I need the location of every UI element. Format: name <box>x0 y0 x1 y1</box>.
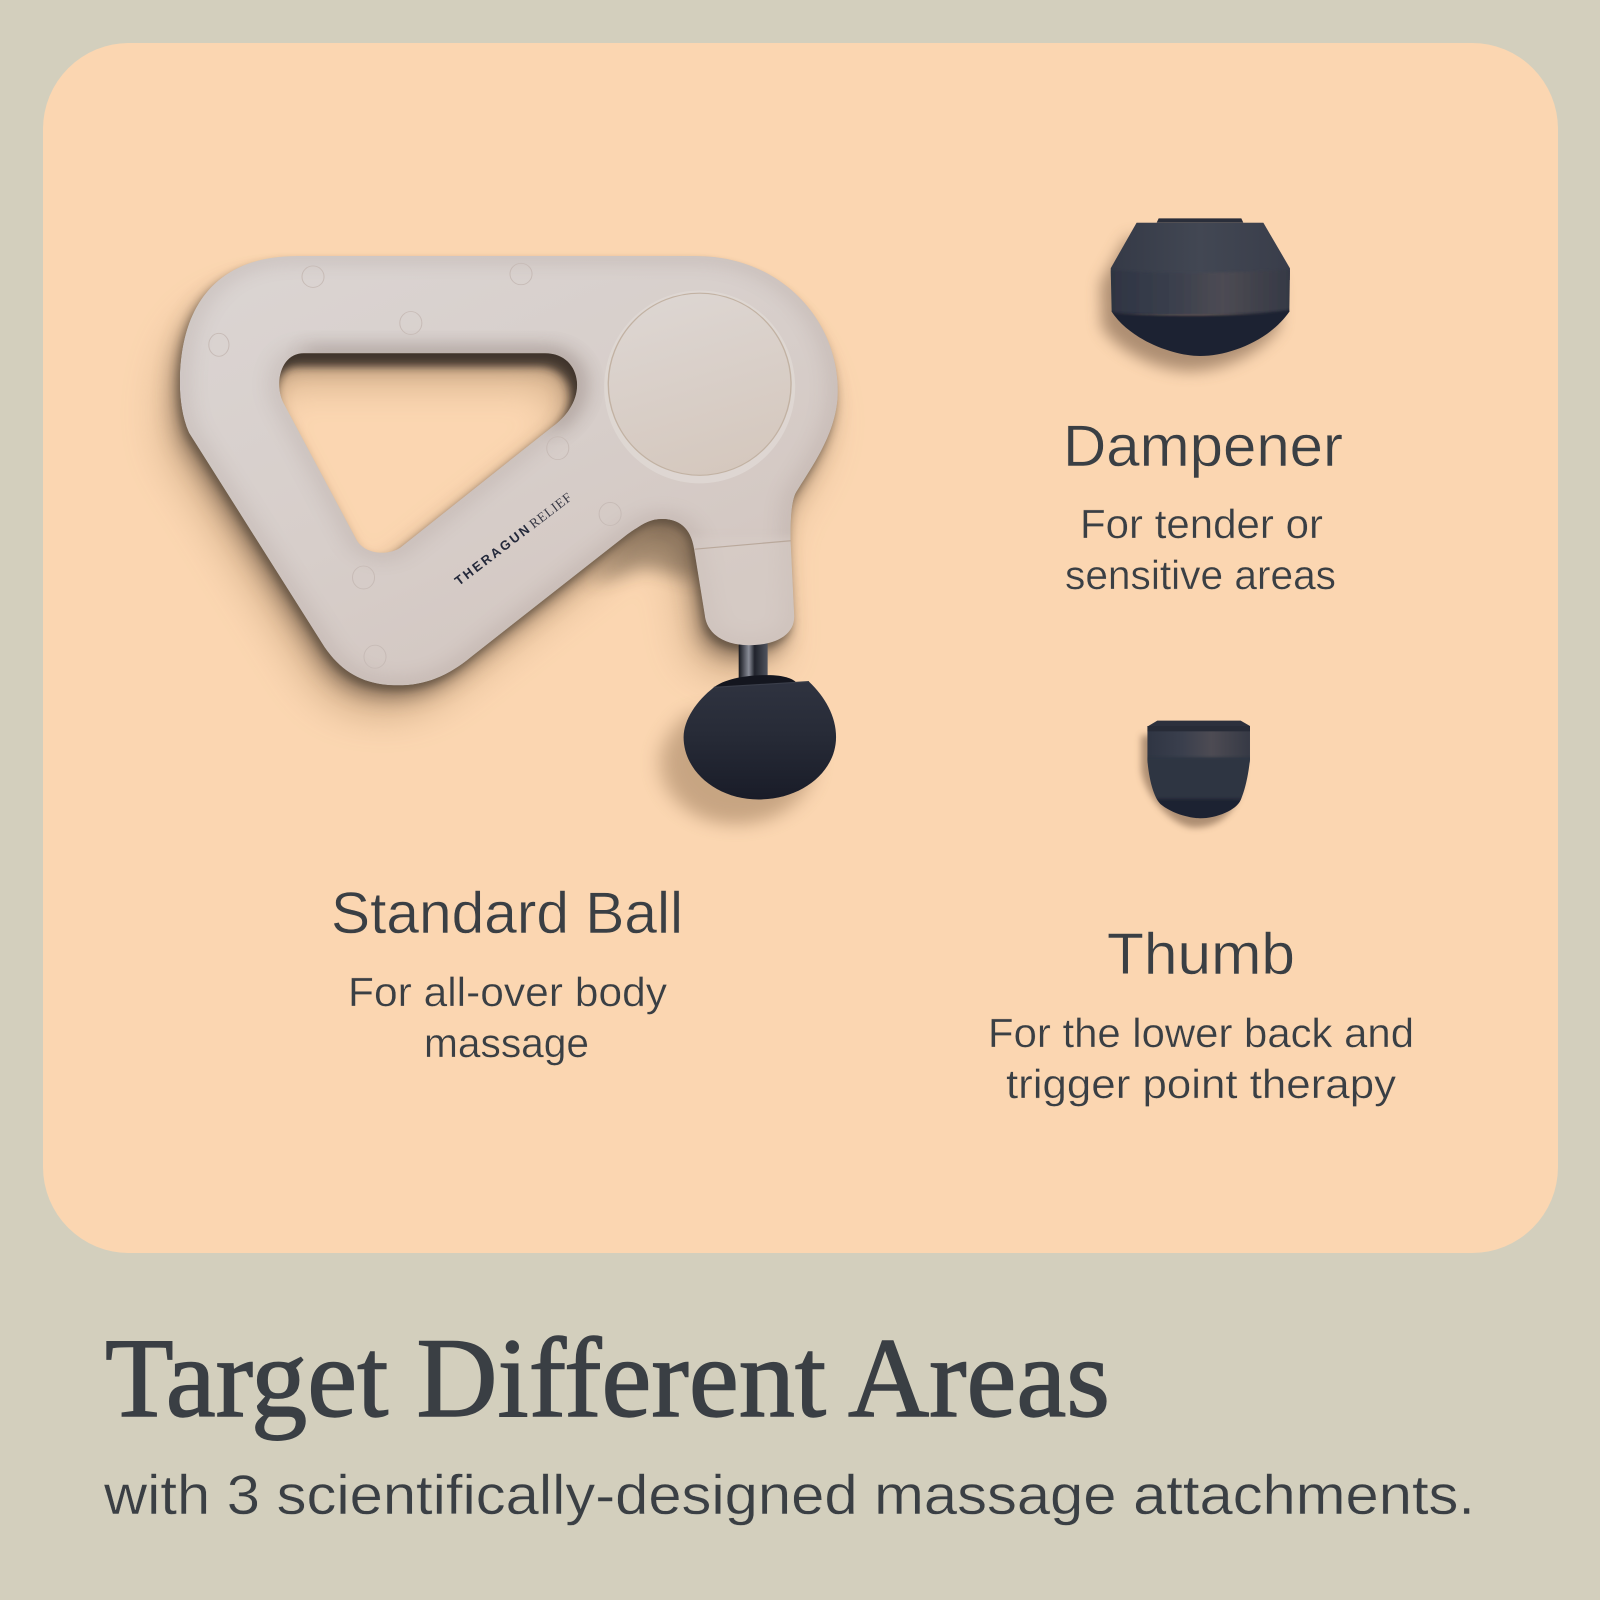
label: dampener: For tender or <box>1080 501 1323 547</box>
label: standard ball: For all-over body <box>348 969 668 1015</box>
embossed dots <box>209 263 621 668</box>
panel: attachments <box>43 43 1558 1253</box>
label: thumb: trigger point therapy <box>1006 1061 1397 1107</box>
shaft <box>739 641 768 682</box>
dampener attachment <box>1101 218 1293 371</box>
dial <box>604 290 795 483</box>
label: dampener: sensitive areas <box>1065 552 1336 598</box>
label: dampener <box>1063 414 1343 598</box>
logo on gun <box>452 489 575 588</box>
ball attachment <box>684 675 836 799</box>
logo on gun: THERAGUN <box>452 522 532 588</box>
label: standard ball: Standard Ball <box>331 881 683 946</box>
dampener shadow <box>1101 238 1280 371</box>
neck seam <box>695 541 791 549</box>
thumb attachment <box>1141 721 1253 828</box>
label: thumb <box>988 922 1414 1107</box>
subtitle: with 3 scientifically-designed massage attachments. <box>103 1463 1475 1526</box>
title: Target Different Areas <box>105 1316 1110 1441</box>
massage gun with standard ball <box>164 256 838 824</box>
thumb shadow <box>1141 735 1243 828</box>
ball shadow <box>661 706 813 824</box>
gun body <box>180 256 838 685</box>
label: thumb: Thumb <box>1107 922 1295 987</box>
label: dampener: Dampener <box>1063 414 1343 479</box>
thumb cap <box>1148 721 1250 726</box>
label: standard ball: massage <box>424 1020 589 1066</box>
dampener cap <box>1157 218 1243 223</box>
gun shadow <box>164 261 835 718</box>
logo on gun: RELIEF <box>526 489 575 531</box>
label: thumb: For the lower back and <box>988 1010 1414 1056</box>
hole shadow <box>280 354 577 428</box>
label: standard ball <box>331 881 683 1066</box>
